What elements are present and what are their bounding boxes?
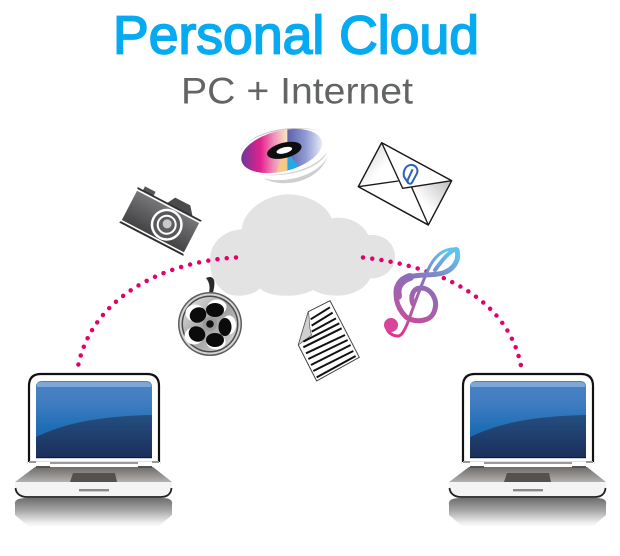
icon: camera [119, 180, 205, 256]
icon: treble clef [386, 249, 458, 336]
icon: document [298, 301, 359, 381]
cloud [210, 194, 395, 296]
dotted connection: cloud to right laptop [363, 258, 522, 372]
icon: disc [238, 125, 327, 183]
icon: envelope [358, 143, 452, 225]
left laptop [15, 374, 172, 527]
dotted connection: left laptop to cloud [77, 258, 236, 372]
title: Personal Cloud [113, 6, 479, 66]
icon: film reel [178, 277, 242, 356]
subtitle: PC + Internet [181, 70, 414, 112]
right laptop [449, 374, 606, 527]
